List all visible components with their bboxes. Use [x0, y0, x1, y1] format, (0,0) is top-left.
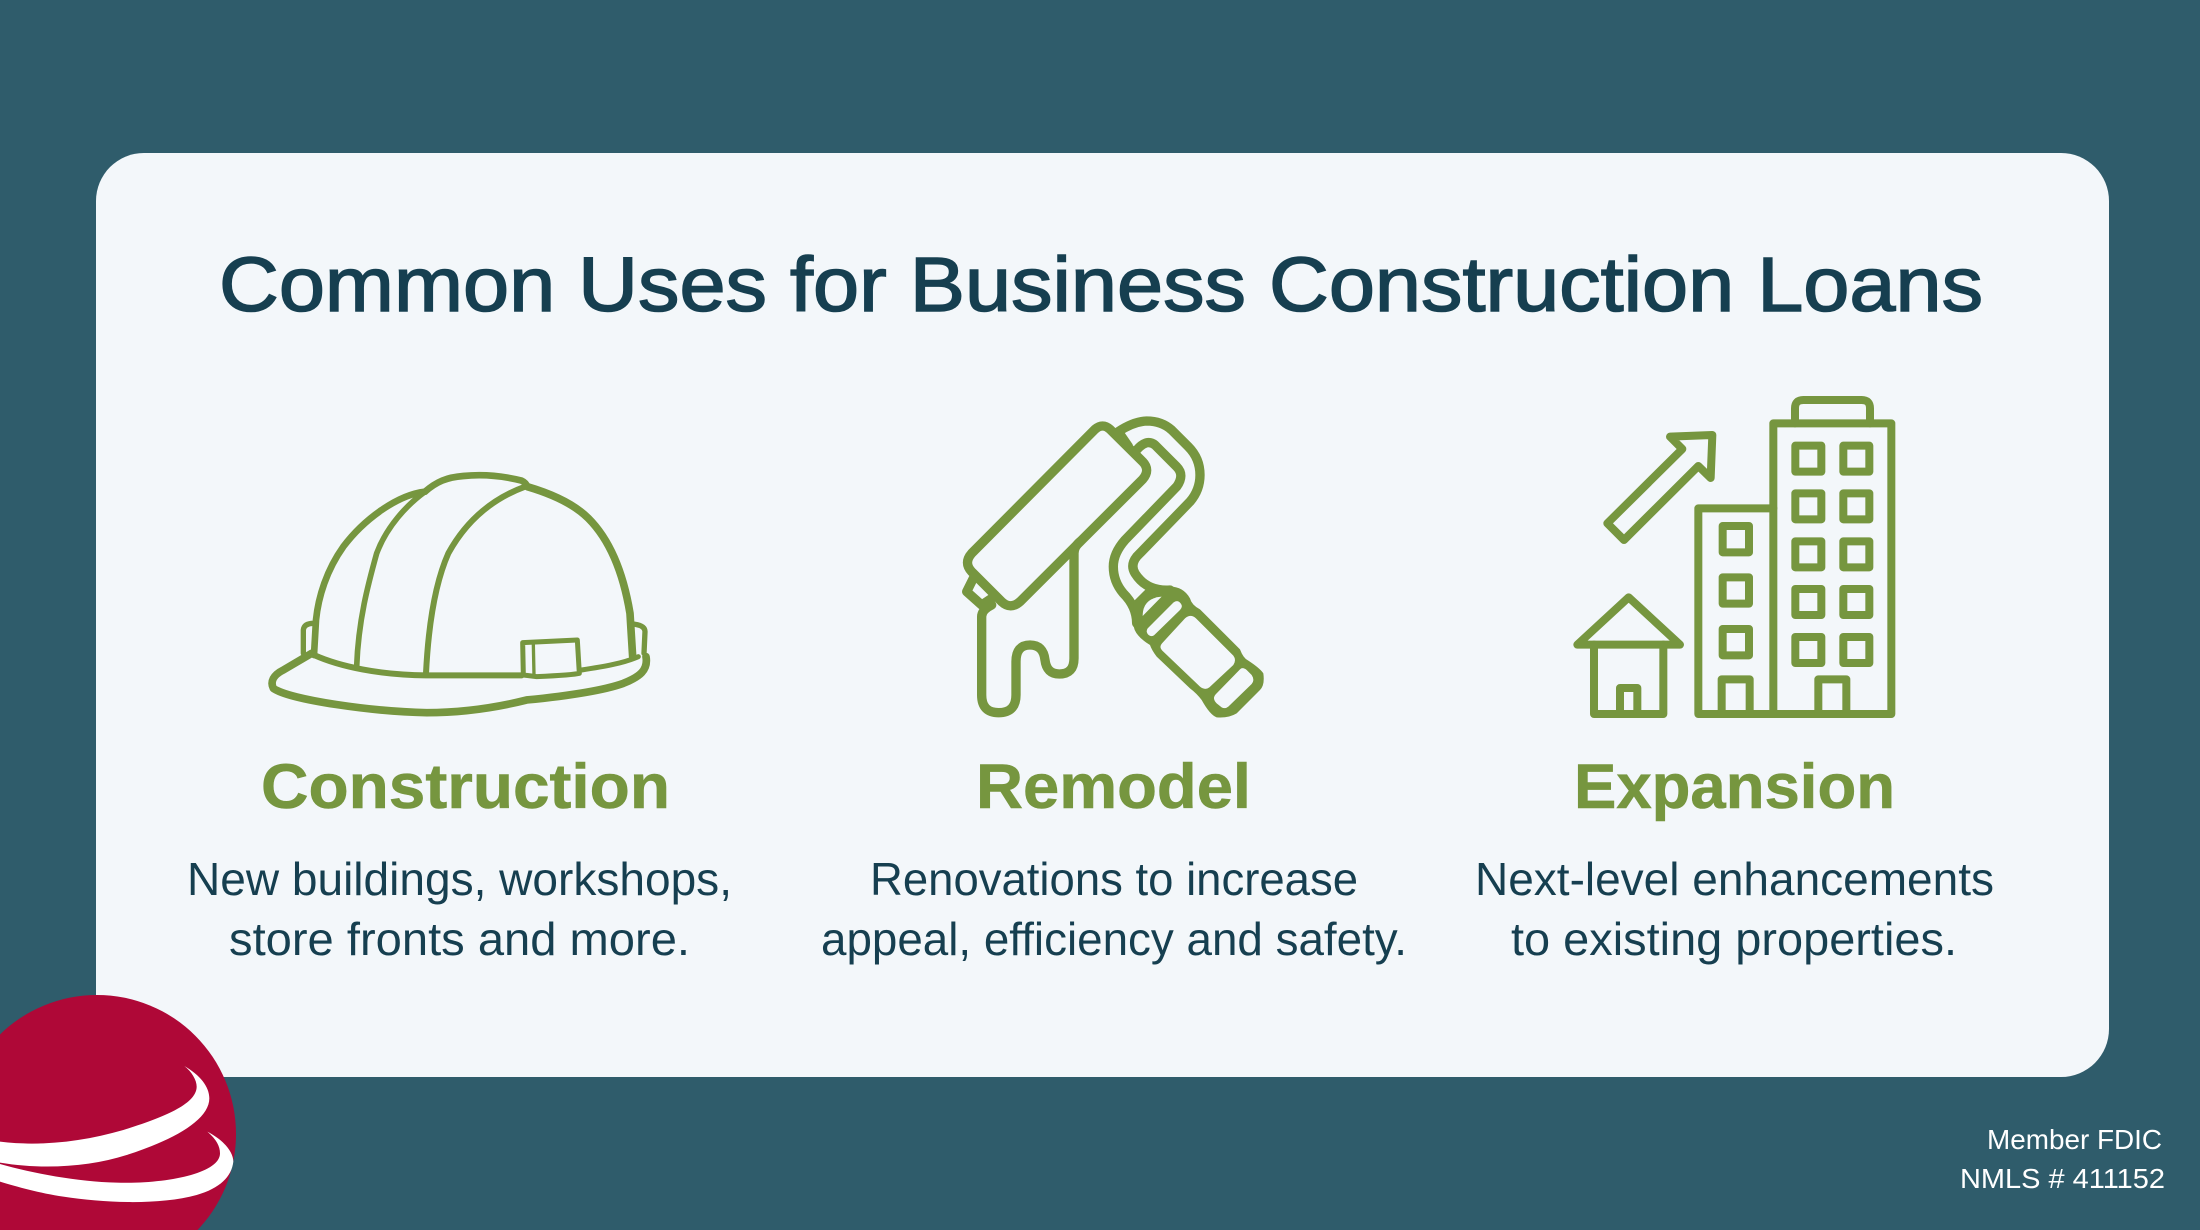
text: expansion description: to existing properties. — [1511, 913, 1957, 965]
text: remodel description: Renovations to increase — [870, 853, 1358, 905]
text: remodel description: appeal, efficiency and safety. — [821, 913, 1407, 965]
text: expansion description: Next-level enhancements — [1475, 853, 1994, 905]
text: expansion description — [1475, 853, 1994, 965]
text: construction description — [187, 853, 732, 965]
column: expansion — [1475, 400, 1994, 965]
icon: paint roller — [967, 421, 1264, 717]
text: construction description: store fronts and more. — [229, 913, 690, 965]
growth arrow — [1607, 435, 1712, 540]
panel: white card — [96, 153, 2109, 1077]
heading: remodel: Remodel — [976, 752, 1251, 822]
roller frame and drip — [967, 421, 1200, 713]
footer: disclosures — [1960, 1124, 2165, 1194]
text: remodel description — [821, 853, 1407, 965]
heading: construction: Construction — [261, 752, 670, 822]
column: remodel — [821, 421, 1407, 965]
icon: buildings and arrow — [1577, 400, 1891, 714]
house — [1577, 597, 1680, 714]
column: construction — [187, 475, 732, 965]
mid building — [1698, 508, 1773, 714]
logo: red globe — [0, 995, 236, 1230]
tall building — [1773, 400, 1891, 714]
footer: disclosures: Member FDIC — [1987, 1124, 2162, 1155]
heading: expansion: Expansion — [1574, 752, 1895, 822]
title: Common Uses for Business Construction Loans — [219, 242, 1983, 328]
icon: hard hat — [272, 475, 646, 713]
roller handle — [1133, 587, 1264, 717]
logo swooshes — [0, 1066, 233, 1202]
handle cut-outs — [1143, 597, 1253, 708]
footer: disclosures: NMLS # 411152 — [1960, 1163, 2165, 1194]
text: construction description: New buildings, workshops, — [187, 853, 732, 905]
